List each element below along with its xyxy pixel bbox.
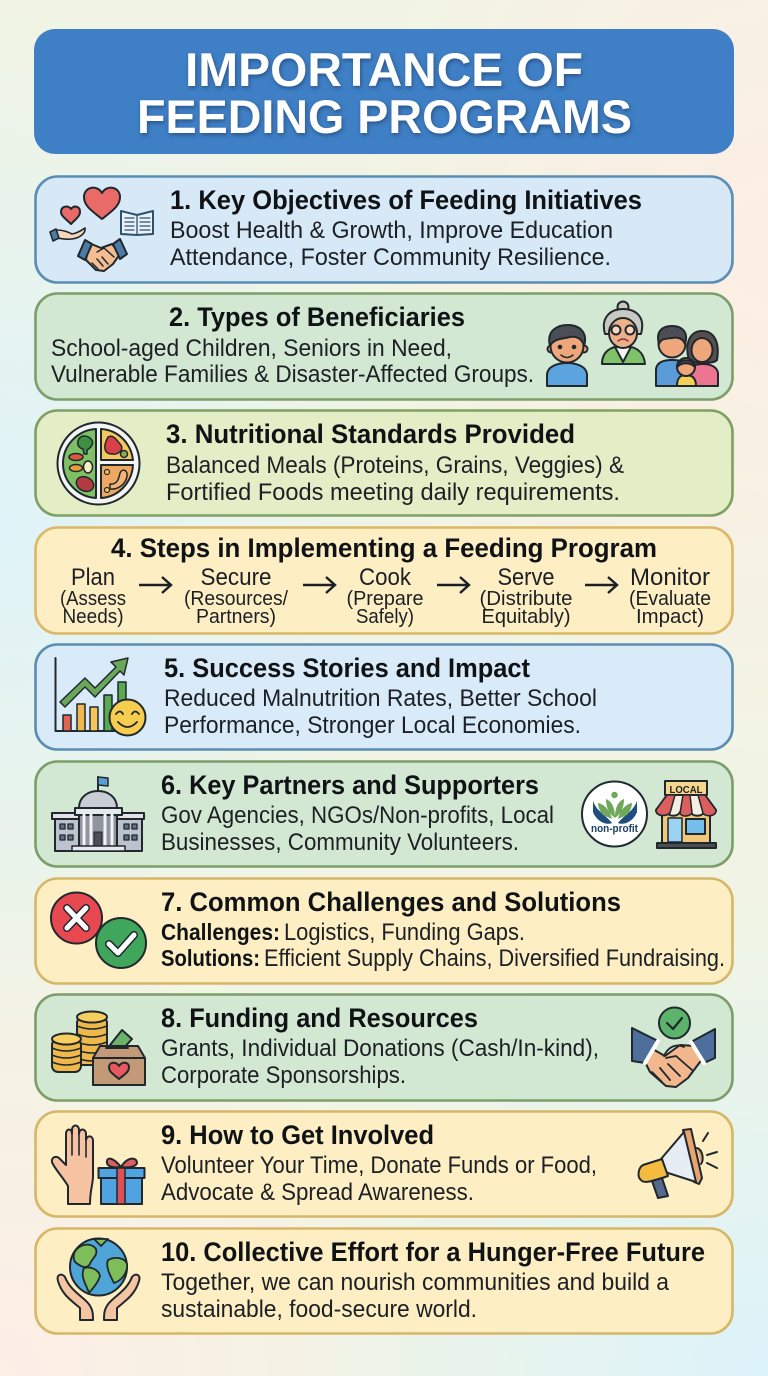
text: funding body: Corporate Sponsorships. [161, 1062, 406, 1089]
icon: non-profit logo [582, 782, 647, 846]
step: monitor: Impact) [636, 606, 704, 628]
text: challenges [161, 919, 525, 946]
icon: child [547, 325, 588, 386]
heading: funding: 8. Funding and Resources [161, 1003, 478, 1033]
panel: 10 collective effort [36, 1228, 732, 1334]
icon: gift box [98, 1159, 144, 1204]
step: monitor [629, 564, 711, 628]
step: plan: (Assess [60, 588, 126, 610]
step: plan [60, 564, 126, 628]
step: monitor: (Evaluate [629, 588, 711, 610]
text: funding body [161, 1035, 599, 1089]
panel: 7 challenges and solutions [36, 878, 732, 984]
heading: nutritional standards: 3. Nutritional Standards Provided [166, 419, 575, 449]
step: serve: Equitably) [482, 606, 570, 628]
text: key objectives body: Boost Health & Growth, Improve Education [170, 217, 613, 244]
text: partners body: Businesses, Community Volunteers. [161, 829, 519, 856]
text: success stories body [164, 685, 597, 739]
icon: government building [52, 777, 144, 851]
text: collective effort body: Together, we can nourish communities and build a [161, 1269, 670, 1296]
text: collective effort body [161, 1269, 670, 1323]
icon: non-profit logo: non-profit [591, 823, 638, 835]
panel: 4 implementation steps [36, 528, 732, 634]
heading: challenges and solutions: 7. Common Challenges and Solutions [161, 887, 621, 917]
text: beneficiaries body [51, 335, 534, 388]
text: success stories body: Performance, Stronger Local Economies. [164, 712, 581, 739]
arrow: secure to cook [303, 577, 335, 593]
step: serve: (Distribute [480, 588, 572, 610]
title banner: FEEDING PROGRAMS [137, 90, 632, 143]
arrow: plan to secure [139, 577, 171, 593]
panel: 1 key objectives [36, 176, 732, 282]
text: beneficiaries body: Vulnerable Families & Disaster-Affected Groups. [51, 361, 534, 388]
heading: success stories: 5. Success Stories and Impact [164, 653, 530, 683]
text: get involved body [161, 1152, 597, 1206]
icon: balanced meal plate [58, 422, 140, 504]
step: serve: Serve [498, 564, 554, 591]
heading: collective effort: 10. Collective Effort for a Hunger-Free Future [161, 1237, 705, 1267]
heading: beneficiaries: 2. Types of Beneficiaries [169, 302, 465, 332]
icon: globe in caring hands [58, 1238, 139, 1320]
arrow: cook to serve [437, 577, 469, 593]
icon: agreement handshake [632, 1008, 715, 1087]
panel: 9 get involved [36, 1112, 732, 1216]
title banner [34, 29, 734, 154]
text: partners body: Gov Agencies, NGOs/Non-profits, Local [161, 802, 554, 829]
text: get involved body: Advocate & Spread Awareness. [161, 1179, 474, 1206]
step: cook: Cook [359, 564, 412, 591]
step: plan: Plan [71, 564, 115, 591]
text: solutions: Efficient Supply Chains, Diversified Fundraising. [264, 945, 725, 972]
text: nutritional standards body: Fortified Foods meeting daily requirements. [166, 479, 620, 506]
icon: coins and donation box [52, 1012, 145, 1085]
heading: get involved: 9. How to Get Involved [161, 1120, 434, 1150]
text: solutions: Solutions: [161, 945, 260, 971]
step: secure [184, 564, 288, 628]
icon: red cross [51, 892, 102, 944]
text: nutritional standards body [166, 452, 624, 506]
icon: family [656, 326, 718, 386]
icon: local shop: LOCAL [670, 784, 703, 796]
text: nutritional standards body: Balanced Meals (Proteins, Grains, Veggies) & [166, 452, 624, 479]
panel: 3 nutritional standards [36, 410, 732, 516]
panel: 5 success stories [36, 644, 732, 750]
step: cook: Safely) [356, 606, 414, 628]
icon: hearts, hand, book and handshake [50, 188, 153, 271]
icon: rising bar chart with smiley [56, 658, 146, 736]
icon: local shop [656, 781, 716, 848]
text: key objectives body: Attendance, Foster Community Resilience. [170, 244, 611, 271]
step: monitor: Monitor [630, 564, 710, 591]
panel: 6 partners [36, 762, 732, 866]
icon: senior woman [602, 302, 645, 364]
text: challenges: Logistics, Funding Gaps. [284, 919, 525, 946]
heading: implementation steps: 4. Steps in Implementing a Feeding Program [111, 533, 657, 563]
text: funding body: Grants, Individual Donations (Cash/In-kind), [161, 1035, 599, 1062]
panel: 2 beneficiaries [36, 294, 732, 400]
icon: megaphone [639, 1129, 717, 1198]
step: secure: (Resources/ [184, 588, 288, 610]
arrow: serve to monitor [585, 577, 617, 593]
text: collective effort body: sustainable, food-secure world. [161, 1296, 477, 1323]
text: beneficiaries body: School-aged Children, Seniors in Need, [51, 335, 452, 362]
title banner: IMPORTANCE OF [185, 43, 583, 96]
icon: raised hand [52, 1126, 93, 1204]
step: secure: Partners) [196, 606, 276, 628]
step: cook [346, 564, 424, 628]
step: secure: Secure [200, 564, 272, 591]
text: key objectives body [170, 217, 613, 271]
step: plan: Needs) [62, 606, 124, 628]
heading: key objectives: 1. Key Objectives of Feeding Initiatives [170, 185, 642, 215]
text: get involved body: Volunteer Your Time, Donate Funds or Food, [161, 1152, 597, 1179]
step: serve [480, 564, 572, 628]
text: challenges: Challenges: [161, 919, 280, 945]
icon: green check [96, 918, 146, 968]
step: cook: (Prepare [346, 588, 424, 610]
panel: 8 funding [36, 994, 732, 1100]
text: success stories body: Reduced Malnutrition Rates, Better School [164, 685, 597, 712]
heading: partners: 6. Key Partners and Supporters [161, 770, 539, 800]
text: partners body [161, 802, 554, 856]
